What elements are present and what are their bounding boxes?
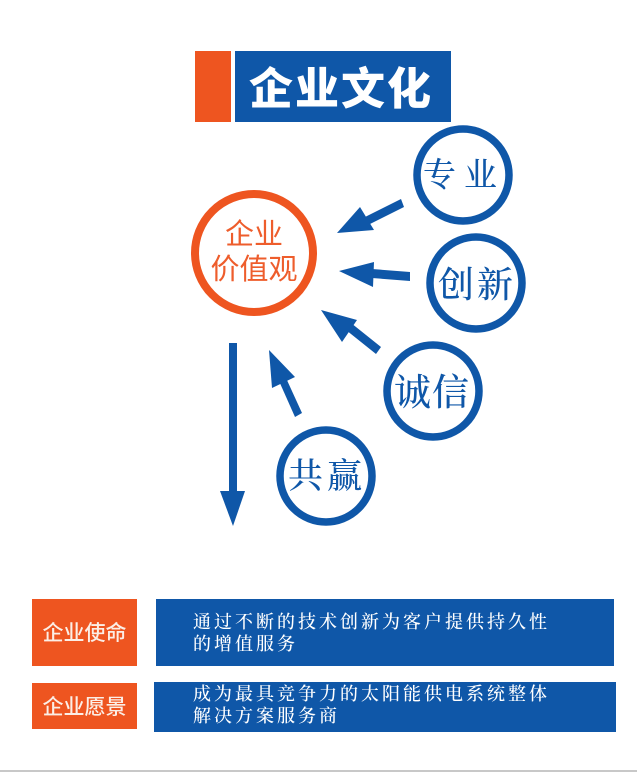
arrow: innovation to values: [339, 262, 410, 287]
label: enterprise vision: 企业愿景: [42, 696, 126, 719]
circle: enterprise values: [195, 194, 313, 312]
circle: integrity: 诚信: [394, 372, 470, 414]
arrow: integrity to values: [321, 310, 381, 354]
text: mission statement: 通过不断的技术创新为客户提供持久性: [193, 612, 550, 632]
arrow: down: [220, 343, 245, 526]
circle: innovation: [430, 237, 522, 329]
panel: mission statement: [156, 599, 614, 666]
circle: win-win: [280, 430, 372, 522]
circle: innovation: 创新: [438, 265, 516, 305]
text: vision statement: 成为最具竞争力的太阳能供电系统整体: [193, 684, 550, 704]
label: enterprise mission: [32, 599, 137, 666]
text: vision statement: 解决方案服务商: [193, 706, 340, 726]
text: mission statement: [193, 612, 550, 654]
circle: enterprise values: 价值观: [210, 253, 298, 286]
arrow: professional to values: [337, 199, 404, 233]
circle: professional: [417, 129, 509, 221]
title accent block: [195, 51, 231, 122]
circle: professional: 专业: [423, 157, 505, 194]
label: enterprise mission: 企业使命: [42, 622, 126, 645]
title banner: 企业文化: [249, 65, 433, 114]
arrow: win-win to values: [269, 350, 302, 417]
text: mission statement: 的增值服务: [193, 634, 298, 654]
circle: win-win: 共赢: [288, 457, 366, 496]
panel: vision statement: [154, 682, 616, 732]
circle: enterprise values: 企业: [225, 218, 283, 251]
bottom rule: [0, 770, 637, 772]
circle: integrity: [387, 345, 479, 437]
text: vision statement: [193, 684, 550, 726]
title banner: [235, 51, 451, 122]
label: enterprise vision: [32, 683, 137, 729]
